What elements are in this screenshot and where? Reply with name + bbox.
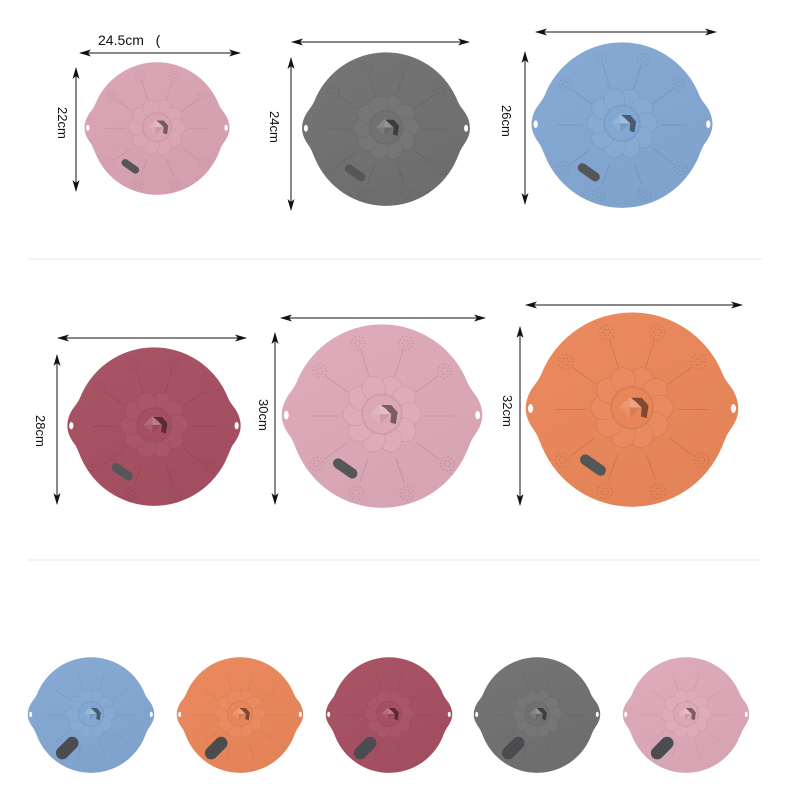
arrow: width bbox=[526, 304, 742, 306]
panel: 28cm maroon lid bbox=[33, 338, 246, 506]
arrow: width bbox=[80, 52, 240, 54]
lid: orange bbox=[526, 312, 738, 507]
panel: 32cm orange lid bbox=[500, 305, 742, 507]
lid: gray option bbox=[474, 657, 600, 773]
arrow: width bbox=[292, 41, 469, 43]
lid: orange option bbox=[177, 657, 303, 773]
arrow: height bbox=[519, 327, 521, 505]
panel: 30cm pink lid bbox=[256, 318, 485, 508]
lid: maroon bbox=[67, 347, 241, 506]
lid: light pink bbox=[282, 324, 482, 508]
arrow: width bbox=[58, 337, 246, 339]
panel: 24cm gray lid bbox=[267, 42, 470, 210]
arrow: height bbox=[274, 333, 276, 504]
panel: 26cm blue lid bbox=[499, 32, 716, 208]
arrow: width bbox=[281, 317, 485, 319]
lid: gray bbox=[302, 52, 470, 206]
arrow: height bbox=[75, 68, 77, 191]
lid: maroon option bbox=[326, 657, 452, 773]
arrow: height bbox=[56, 355, 58, 504]
arrow: height bbox=[290, 58, 292, 210]
panel: 22cm pink lid bbox=[55, 32, 240, 195]
arrow: width bbox=[536, 31, 716, 33]
height label: 30cm bbox=[256, 399, 271, 431]
lid: pink option bbox=[623, 657, 749, 773]
panel: colour options row bbox=[28, 657, 749, 773]
lid: blue bbox=[532, 42, 712, 208]
height label: 28cm bbox=[33, 415, 48, 447]
height label: 32cm bbox=[500, 395, 515, 427]
arrow: height bbox=[524, 52, 526, 204]
height label: 24cm bbox=[267, 111, 282, 143]
lid: blue option bbox=[28, 657, 154, 773]
width label: 24.5cm ( bbox=[98, 32, 161, 48]
lid: pink 24.5 by 22 bbox=[85, 62, 229, 195]
height label: 26cm bbox=[499, 105, 514, 137]
height label: 22cm bbox=[55, 107, 70, 139]
